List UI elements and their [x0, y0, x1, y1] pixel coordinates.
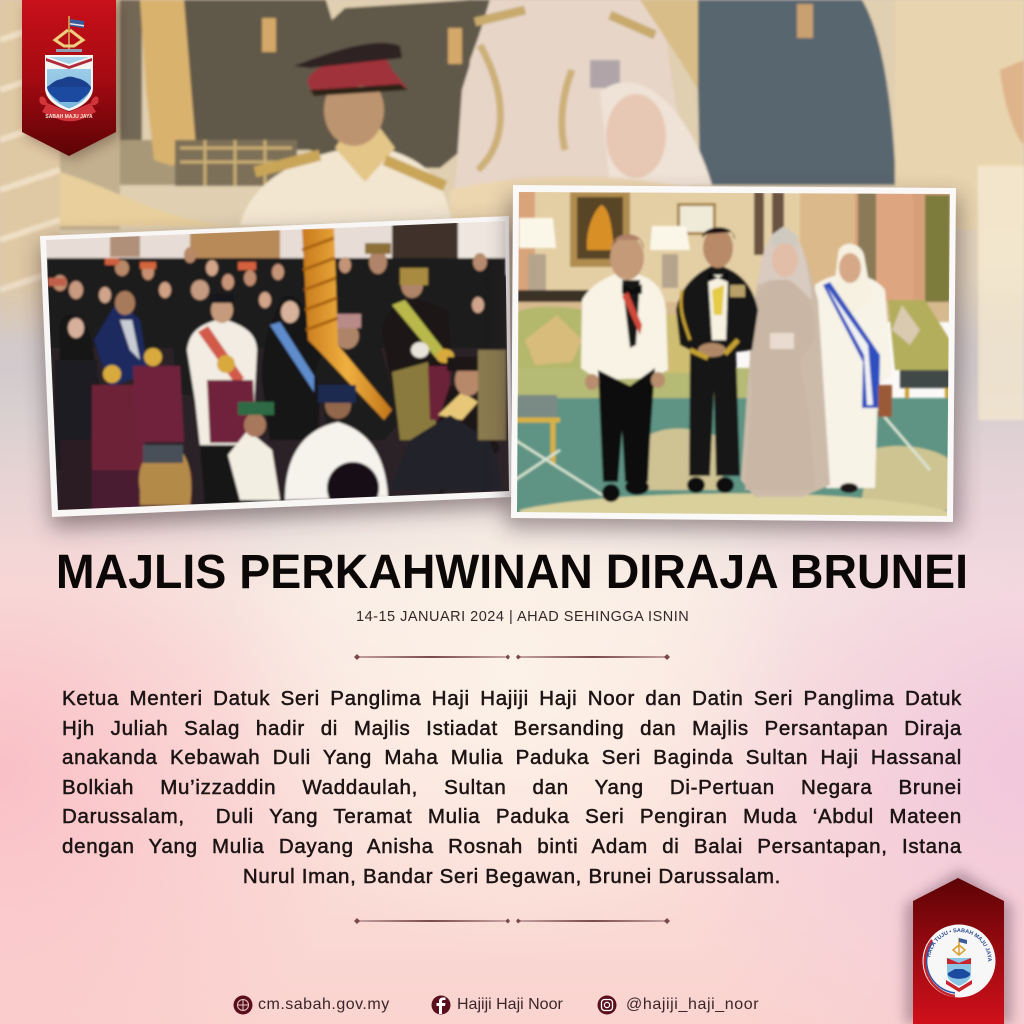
banner: Hala Tuju badge bottom right — [898, 866, 1018, 1024]
footer: instagram handle: @hajiji_haji_noor — [626, 996, 759, 1013]
right pale column — [978, 167, 1024, 420]
icon: Sabah coat of arms: SABAH MAJU JAYA — [45, 114, 93, 120]
photo: reception hall — [40, 215, 515, 528]
banner: Sabah crest top left — [22, 0, 120, 160]
icon: Sabah coat of arms — [39, 16, 99, 121]
faded background photo — [0, 0, 1024, 345]
body paragraph: dengan Yang Mulia Dayang Anisha Rosnah binti Adam di Balai Persantapan, Istana — [62, 835, 962, 858]
title: MAJLIS PERKAHWINAN DIRAJA BRUNEI — [56, 546, 968, 599]
divider top — [354, 654, 670, 660]
body paragraph: Bolkiah Mu’izzaddin Waddaulah, Sultan dan Yang Di-Pertuan Negara Brunei — [62, 776, 962, 799]
body paragraph: Hjh Juliah Salag hadir di Majlis Istiadat Bersanding dan Majlis Persantapan Diraja — [62, 717, 962, 740]
divider bottom — [354, 918, 670, 924]
figure: groom — [676, 227, 758, 493]
footer: facebook name: Hajiji Haji Noor — [457, 996, 563, 1013]
body paragraph: Ketua Menteri Datuk Seri Panglima Haji Hajiji Haji Noor dan Datin Seri Panglima Datuk — [62, 687, 962, 710]
body paragraph: Nurul Iman, Bandar Seri Begawan, Brunei Darussalam. — [243, 865, 781, 888]
body paragraph — [62, 687, 962, 888]
icon: round Hala Tuju logo — [922, 924, 996, 998]
figure: man in white jacket — [581, 234, 668, 502]
icon: round Hala Tuju logo: HALA TUJU • SABAH MAJU JAYA — [926, 928, 992, 962]
icon: instagram — [598, 996, 616, 1014]
icon: website globe — [234, 996, 252, 1014]
figure: bride — [741, 226, 830, 497]
icon: facebook — [432, 996, 450, 1014]
date subtitle: 14-15 JANUARI 2024 | AHAD SEHINGGA ISNIN — [356, 609, 689, 625]
photo: wedding couple portrait — [506, 185, 960, 530]
body paragraph: anakanda Kebawah Duli Yang Maha Mulia Paduka Seri Baginda Sultan Haji Hassanal — [62, 746, 962, 769]
figure: woman with blue sash — [812, 244, 892, 493]
body paragraph: Darussalam, Duli Yang Teramat Mulia Paduka Seri Pengiran Muda ‘Abdul Mateen — [62, 805, 962, 828]
footer: website: cm.sabah.gov.my — [258, 996, 390, 1013]
